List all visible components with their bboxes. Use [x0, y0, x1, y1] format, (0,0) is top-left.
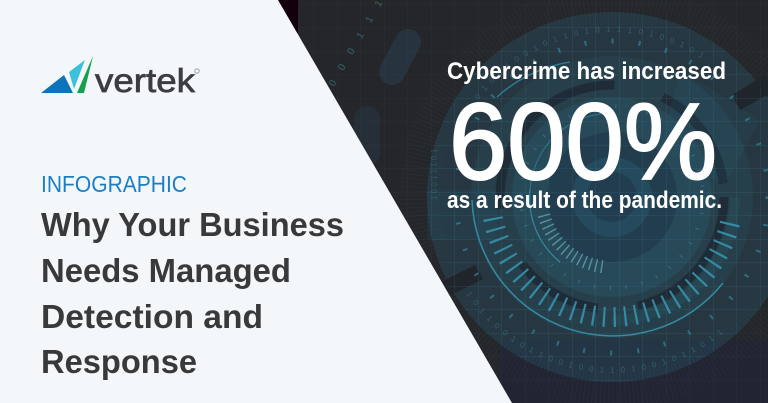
statistic follow-up: as a result of the pandemic. [447, 187, 722, 214]
graphic: radar rings [420, 5, 768, 389]
callout: cybercrime statistic [447, 58, 726, 214]
icon: blue triangle [41, 75, 73, 93]
heading: Response [41, 343, 197, 380]
heading [41, 206, 344, 380]
heading: Detection and [41, 298, 263, 335]
statistic number: 600% [449, 81, 717, 203]
graphic: left capsules and binary digits [327, 0, 426, 166]
graphic: binary text rings: 1 0 1 1 0 0 1 0 1 1 0 0 1 0 0 1 1 0 1 0 0 1 0 1 1 0 1 1 [466, 292, 722, 373]
logo: vertek [41, 56, 199, 99]
graphic: binary text rings: 1 0 0 1 1 1 0 1 [430, 148, 439, 200]
statistic lead-in: Cybercrime has increased [447, 58, 726, 85]
icon: green sliver [77, 56, 93, 93]
graphic: binary text rings [430, 26, 722, 373]
panel: light diagonal panel [0, 0, 512, 403]
heading: Needs Managed [41, 252, 291, 289]
eyebrow label: INFOGRAPHIC [41, 171, 187, 197]
graphic: binary text rings: 0 1 0 0 1 0 0 1 0 1 1 0 1 0 1 1 1 0 1 0 0 1 0 1 [475, 26, 703, 99]
icon: cyan triangle [69, 60, 85, 89]
heading: Why Your Business [41, 206, 344, 243]
graphic: tick marks and arcs [456, 41, 768, 353]
logo wordmark: vertek [95, 62, 196, 99]
graphic: grid lines [300, 0, 768, 403]
